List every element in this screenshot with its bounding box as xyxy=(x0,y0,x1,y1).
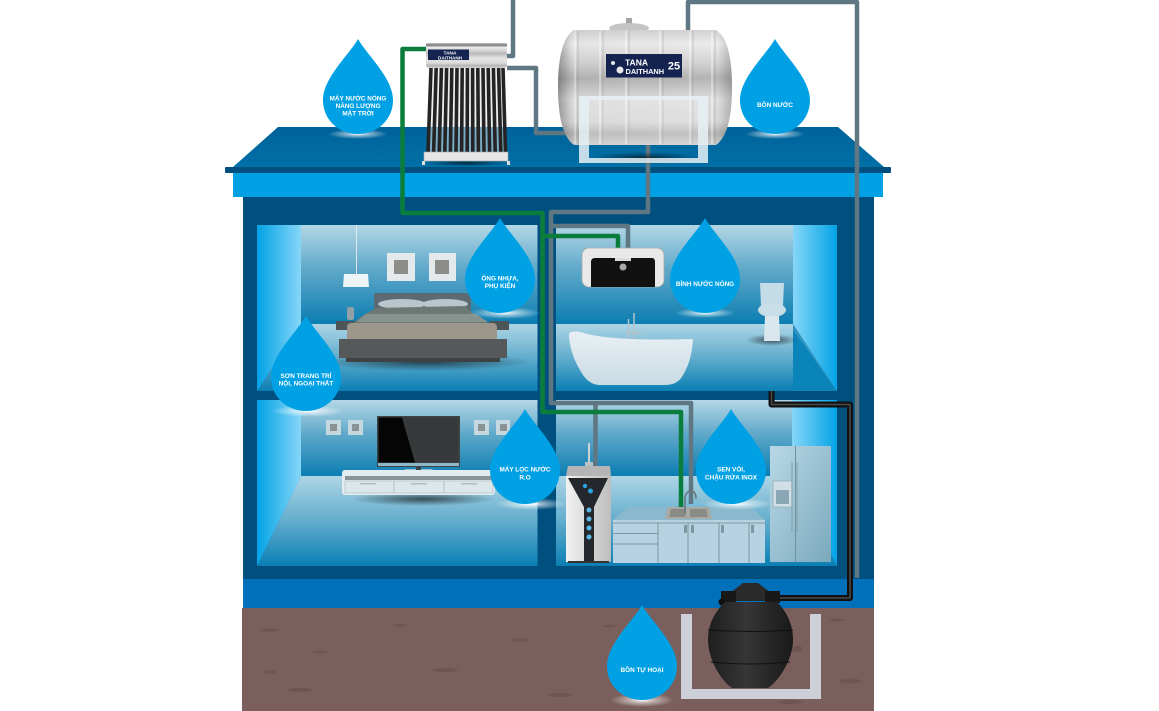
pipes: green water lines xyxy=(402,49,681,507)
logo plate: TANA xyxy=(625,58,648,68)
drop: solar water heater xyxy=(323,39,393,139)
drop: plastic pipes: ỐNG NHỰA, xyxy=(481,272,519,282)
solar water heater xyxy=(422,43,510,166)
house walls xyxy=(243,197,874,579)
logo plate: DAITHANH xyxy=(626,67,664,76)
panel: bedroom xyxy=(257,225,538,391)
ground xyxy=(242,608,874,711)
drop: paint: SƠN TRANG TRÍ xyxy=(281,371,332,380)
drop: RO purifier xyxy=(490,409,567,510)
drop: faucets and sinks: CHẬU RỬA INOX xyxy=(705,472,758,482)
wall frames xyxy=(387,253,456,281)
drop: water heater: BÌNH NƯỚC NÓNG xyxy=(676,279,734,288)
drop: water tank: BỒN NƯỚC xyxy=(757,99,793,109)
white stand xyxy=(579,96,708,163)
drop: plastic pipes xyxy=(465,218,541,319)
sink xyxy=(665,507,712,519)
drop: paint: NỘI, NGOẠI THẤT xyxy=(279,378,333,388)
drop: water tank xyxy=(740,39,810,139)
refrigerator xyxy=(770,446,831,562)
logo plate: DAITHANH xyxy=(438,55,463,60)
drop: plastic pipes: PHỤ KIỆN xyxy=(485,281,516,290)
bed xyxy=(320,293,530,371)
panel: bathroom xyxy=(556,225,837,391)
drop: solar water heater: NĂNG LƯỢNG xyxy=(336,101,380,110)
panel: living room xyxy=(257,400,538,566)
vacuum tubes xyxy=(428,68,506,152)
logo plate: 25 xyxy=(668,60,680,72)
drop: RO purifier: MÁY LỌC NƯỚC xyxy=(499,464,551,474)
wall frames xyxy=(326,420,510,435)
tv xyxy=(377,416,460,473)
pipes: grey water lines xyxy=(507,0,857,578)
roof xyxy=(225,127,891,197)
logo plate xyxy=(428,50,469,60)
drop: faucets and sinks: SEN VÒI, xyxy=(717,464,745,474)
water heater xyxy=(582,248,664,287)
logo plate xyxy=(606,54,682,78)
water purifier xyxy=(566,443,611,563)
cap xyxy=(609,18,649,33)
drop: septic tank xyxy=(607,605,677,707)
toilet xyxy=(746,283,798,346)
drop: water heater xyxy=(670,218,740,318)
lamp xyxy=(343,225,369,287)
drop: septic tank: BỒN TỰ HOẠI xyxy=(621,664,664,674)
tv cabinet xyxy=(342,470,495,506)
drop: solar water heater: MÁY NƯỚC NÓNG xyxy=(330,94,386,102)
logo plate: TANA xyxy=(444,50,457,56)
panel: kitchen xyxy=(556,400,837,566)
house base band xyxy=(243,579,874,608)
kitchen counter with sink xyxy=(613,491,765,563)
pipes: black drain line xyxy=(772,391,850,598)
drop: solar water heater: MẶT TRỜI xyxy=(342,108,374,118)
drop: RO purifier: R.O xyxy=(519,474,531,482)
drop: paint xyxy=(271,316,344,417)
stainless water tank xyxy=(558,18,732,164)
drop: faucets and sinks xyxy=(696,409,773,510)
septic tank xyxy=(681,583,821,699)
bathtub xyxy=(569,313,693,385)
